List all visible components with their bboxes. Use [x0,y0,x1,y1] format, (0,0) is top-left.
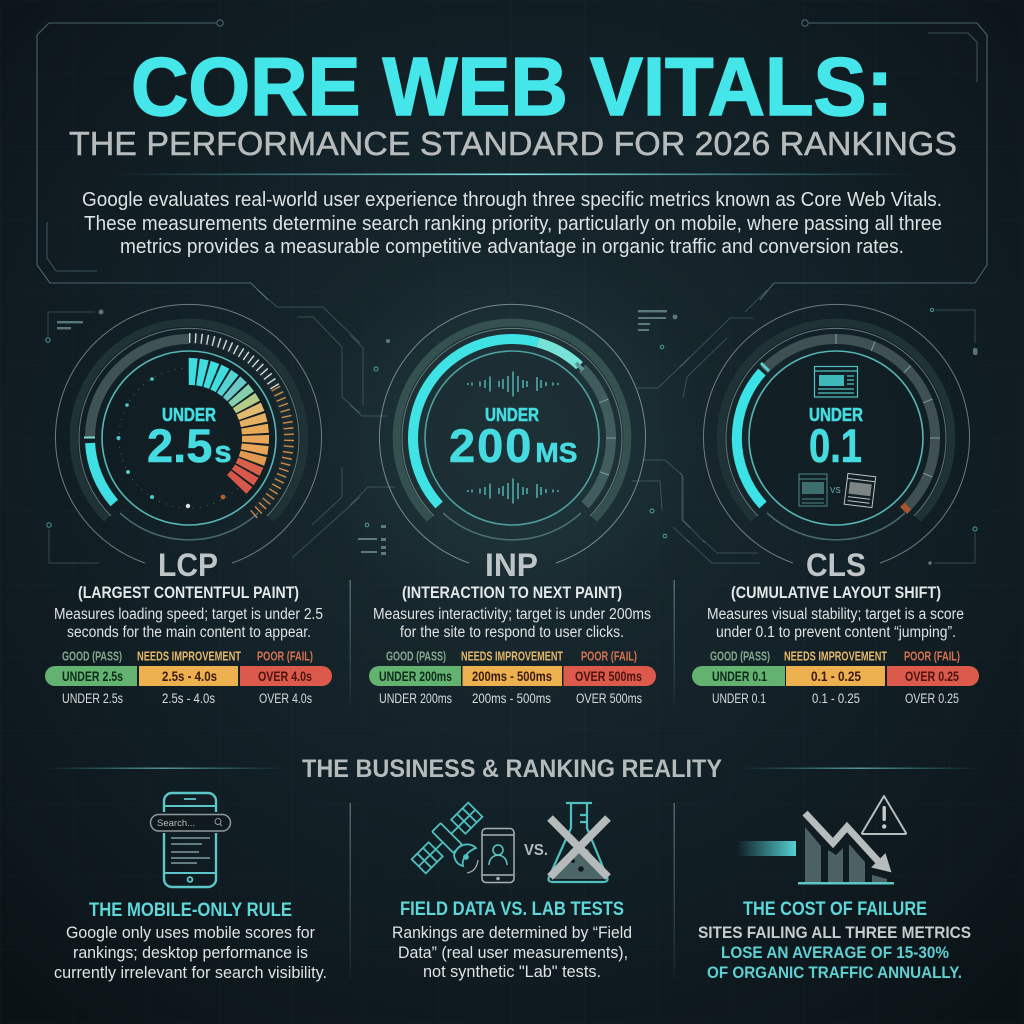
description [373,606,651,641]
icon: crossed-out flask [548,803,608,882]
threshold bar: OVER 500ms [575,668,642,684]
intro paragraph: These measurements determine search ranking priority, particularly on mobile, where passing all three [84,213,942,235]
description: for the site to respond to user clicks. [400,624,624,641]
threshold labels: GOOD (PASS) [386,650,446,664]
icon: phone with user [482,828,514,882]
threshold labels: POOR (FAIL) [581,650,637,664]
icon: phone with search: Search... [157,818,195,829]
icon: layout comparison [799,473,876,508]
description: rankings; desktop performance is [73,943,308,962]
gauge: LCP [56,304,321,563]
icon: phone with search [150,793,230,887]
heading: THE COST OF FAILURE [743,899,927,920]
track [764,334,940,510]
description [54,923,327,982]
full name: (CUMULATIVE LAYOUT SHIFT) [731,583,941,602]
threshold values: OVER 500ms [576,691,642,706]
segment meter [187,358,269,494]
gauge: CLS: 0.1 [809,419,862,472]
threshold bar: OVER 4.0s [258,668,312,684]
intro paragraph [82,189,942,258]
threshold labels: POOR (FAIL) [904,650,960,664]
panel: INP details [369,547,656,706]
LCP value: UNDER [162,405,216,425]
statistic: LOSE AN AVERAGE OF 15-30% [721,943,949,962]
gauge: INP: 200MS [449,419,577,472]
track [582,368,616,505]
threshold values: 200ms - 500ms [472,691,551,706]
section dividers [350,803,675,978]
panel: field data vs lab tests [392,799,632,981]
icon: web page [814,366,858,397]
threshold bar: UNDER 200ms [379,668,452,684]
gauge: INP [379,304,646,563]
heading: CLS [806,547,866,583]
full name: (LARGEST CONTENTFUL PAINT) [78,583,299,602]
threshold bar: 2.5s - 4.0s [162,668,217,684]
header frame [37,20,987,300]
full name: (INTERACTION TO NEXT PAINT) [402,583,622,602]
vs label: VS. [524,842,548,859]
threshold labels: NEEDS IMPROVEMENT [784,650,887,664]
heading: INP [485,547,538,583]
threshold bar: 200ms - 500ms [472,668,552,684]
intro paragraph: Google evaluates real-world user experience through three specific metrics known as Core Web Vitals. [82,189,942,211]
description: Measures visual stability; target is a score [707,606,964,623]
description [54,606,323,641]
threshold values: UNDER 200ms [379,691,452,706]
threshold bar: OVER 0.25 [905,668,959,684]
statistic: SITES FAILING ALL THREE METRICS [698,923,971,942]
CLS value: UNDER [809,405,863,425]
panel: mobile-only rule [54,793,327,982]
threshold labels: POOR (FAIL) [257,650,313,664]
threshold values: OVER 4.0s [259,691,312,706]
threshold bar: UNDER 0.1 [712,668,767,684]
threshold values [712,691,959,706]
subtitle: THE PERFORMANCE STANDARD FOR 2026 RANKINGS [69,125,957,162]
gauge: CLS [704,304,970,563]
description: not synthetic "Lab" tests. [423,962,601,981]
threshold values: UNDER 2.5s [62,691,123,706]
tick marks [189,338,289,515]
progress arc [413,339,538,505]
threshold labels: NEEDS IMPROVEMENT [461,650,563,664]
threshold bar: 0.1 - 0.25 [811,668,861,684]
panel: LCP details [45,547,332,706]
threshold values [62,691,312,706]
icon: warning triangle [862,796,906,834]
threshold values: 2.5s - 4.0s [162,691,215,706]
description: Data” (real user measurements), [398,943,628,962]
intro paragraph: metrics provides a measurable competitive advantage in organic traffic and conversion rates. [120,236,904,258]
threshold values: UNDER 0.1 [712,691,766,706]
waveforms [468,372,558,504]
description: seconds for the main content to appear. [67,624,311,641]
threshold bar [369,666,656,686]
threshold labels [386,650,637,664]
threshold values [379,691,642,706]
heading: FIELD DATA VS. LAB TESTS [400,899,624,920]
column dividers [350,580,675,705]
threshold labels: NEEDS IMPROVEMENT [137,650,241,664]
threshold labels: GOOD (PASS) [62,650,122,664]
icon: speed bar [737,841,796,856]
threshold bar [45,666,332,686]
progress arc [90,443,114,503]
description: currently irrelevant for search visibility. [54,963,327,982]
statistic: OF ORGANIC TRAFFIC ANNUALLY. [707,963,962,982]
title: CORE WEB VITALS: [131,40,893,133]
threshold bar: UNDER 2.5s [62,668,123,684]
threshold values: OVER 0.25 [905,691,959,706]
icon: layout comparison: VS [830,486,841,495]
heading: THE MOBILE-ONLY RULE [89,900,292,921]
INP value: UNDER [485,405,539,425]
description: Rankings are determined by “Field [392,923,632,942]
panel: cost of failure [698,796,971,982]
statistic [698,923,971,982]
description [707,606,964,641]
icon: declining chart [798,813,894,884]
description: Google only uses mobile scores for [66,923,315,942]
threshold labels [710,650,960,664]
progress arc [737,372,763,505]
icon: satellite [408,799,486,877]
threshold labels: GOOD (PASS) [710,650,770,664]
section heading: THE BUSINESS & RANKING REALITY [302,755,722,783]
description: Measures loading speed; target is under 2.5 [54,606,323,623]
description [392,923,632,981]
threshold values: 0.1 - 0.25 [812,691,860,706]
threshold bar [692,666,979,686]
threshold labels [62,650,313,664]
panel: CLS details [692,547,979,706]
gauge: LCP: 2.5s [147,419,232,472]
description: Measures interactivity; target is under 200ms [373,606,651,623]
heading: LCP [158,547,218,583]
description: under 0.1 to prevent content “jumping”. [716,624,956,641]
